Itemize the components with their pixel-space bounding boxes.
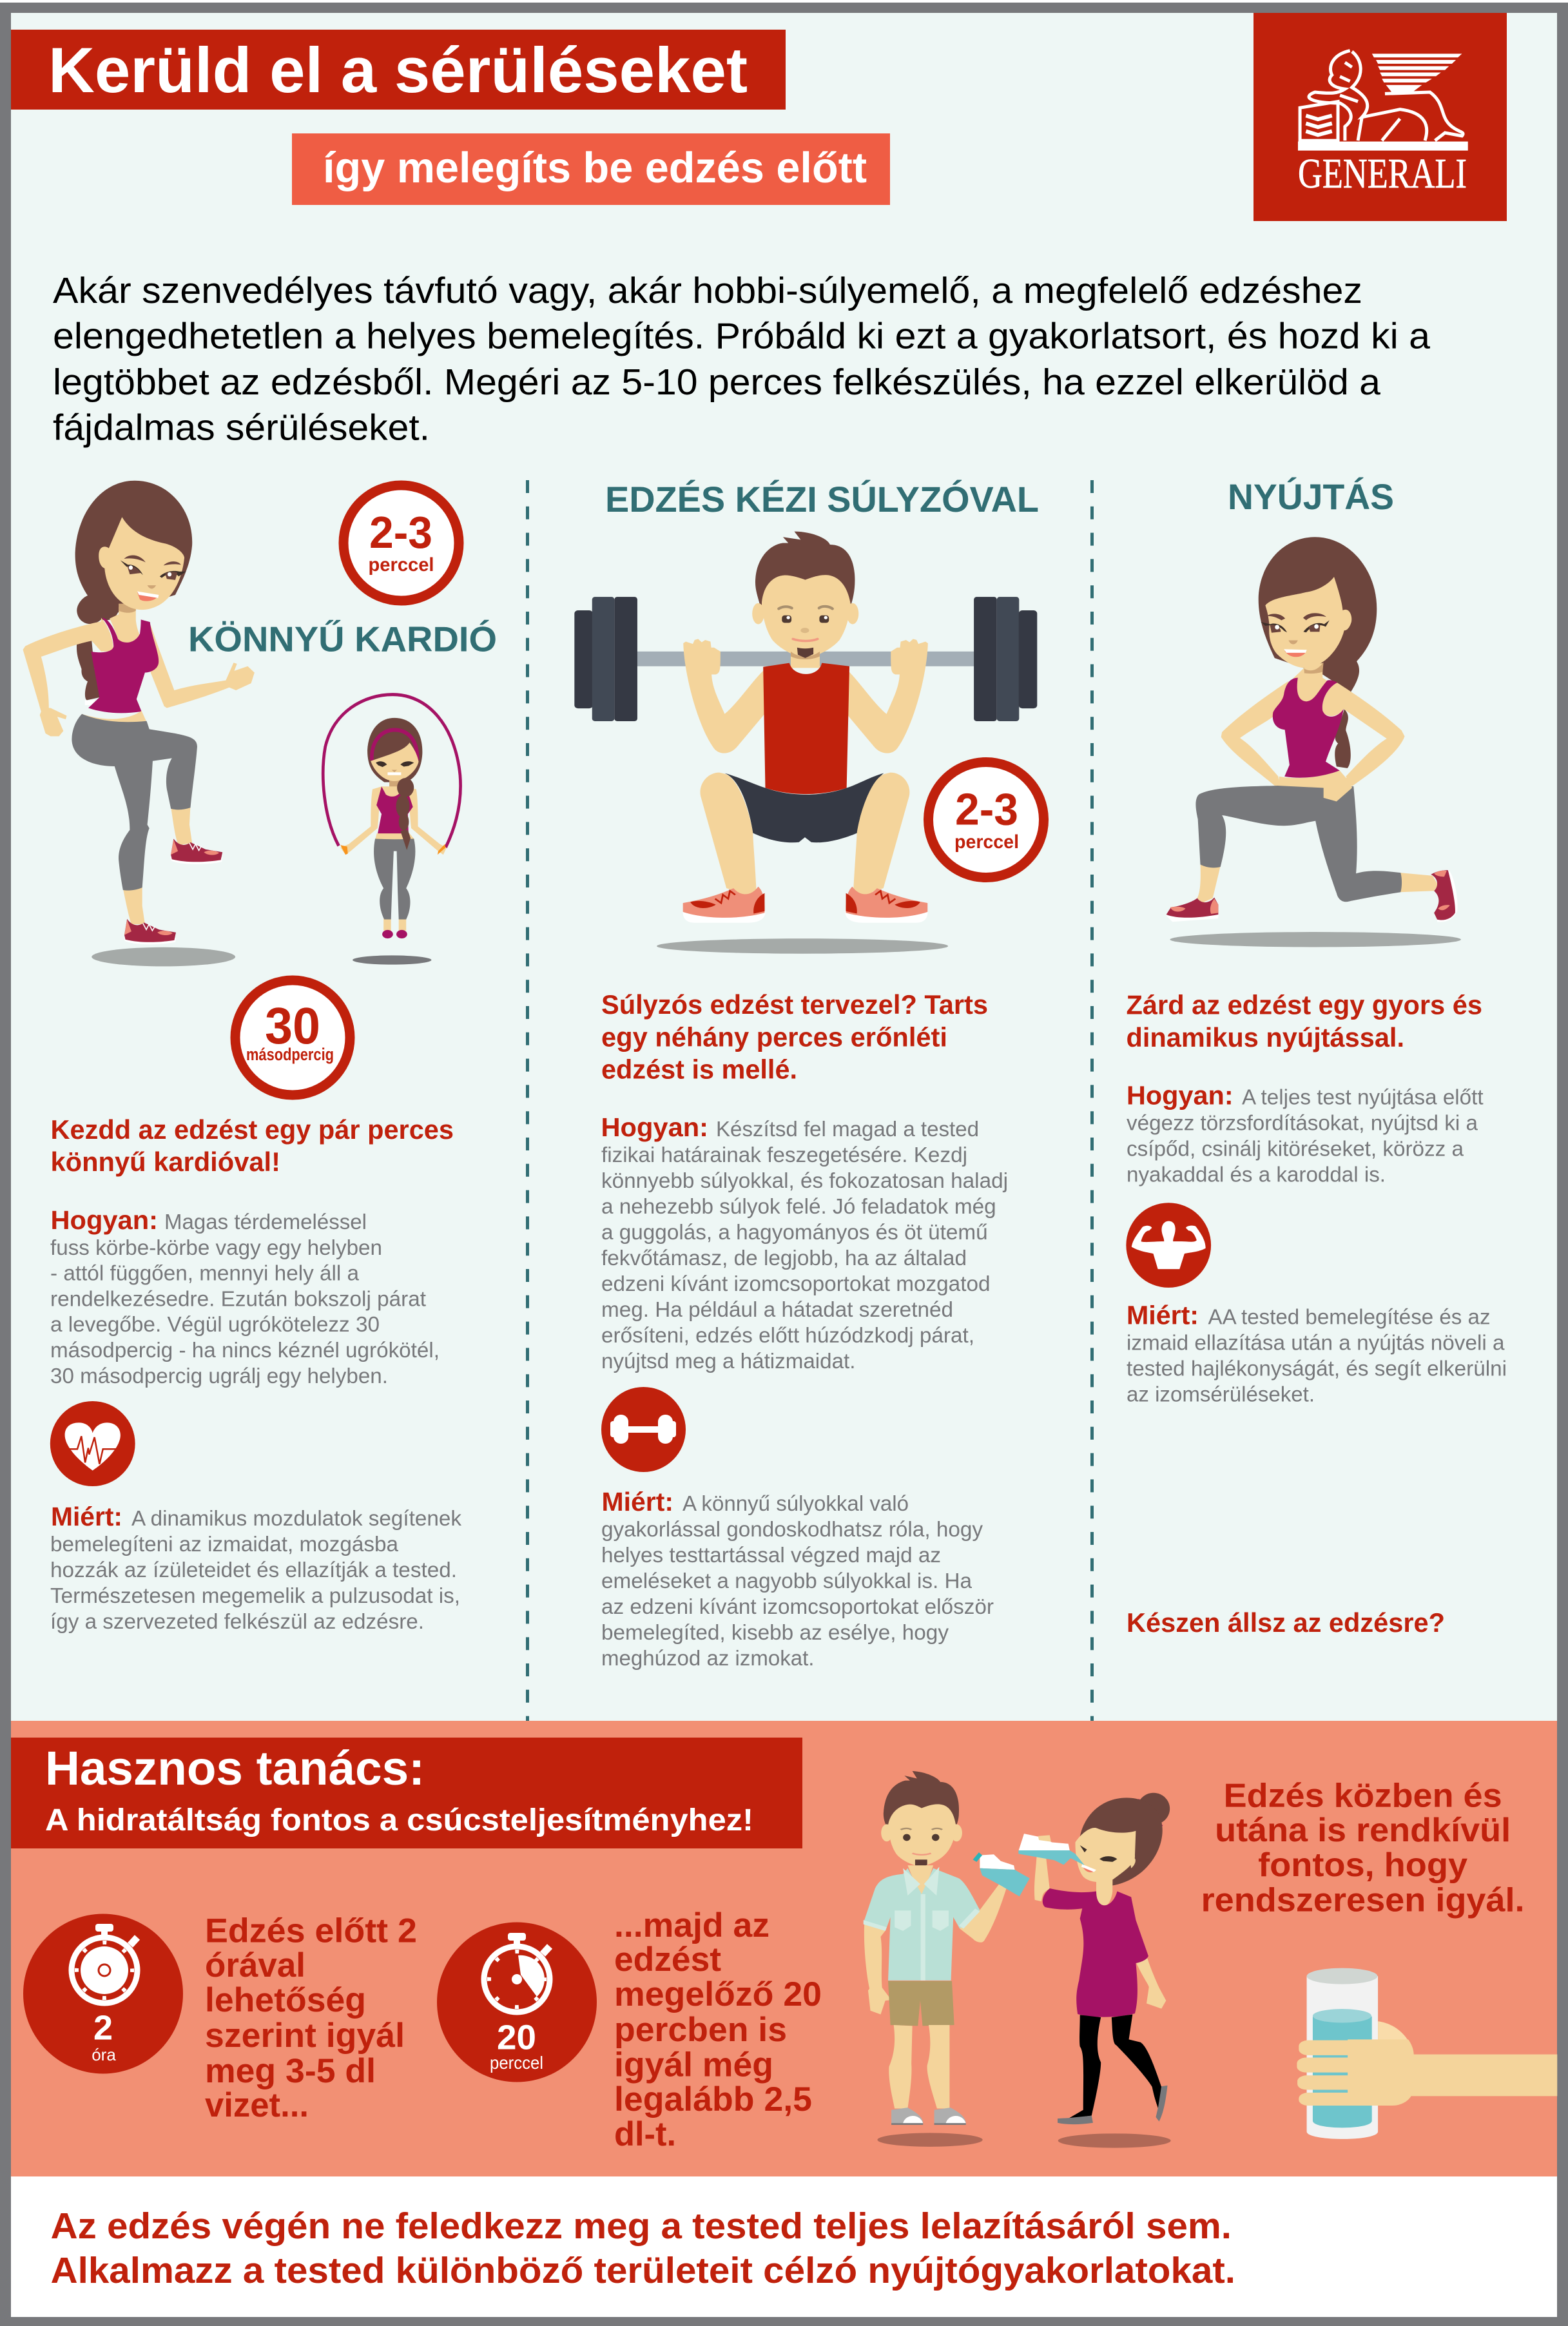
text: edzés közben és utána: utána is rendkívül [1215, 1812, 1511, 1849]
badge: 30 másodpercig [235, 980, 350, 1095]
text block: kardió: Magas térdemeléssel [164, 1210, 367, 1234]
text: majd az edzést megelőző: edzést [614, 1941, 721, 1979]
icon: stopwatch 20 perccel [437, 1922, 597, 2082]
badge: 30 másodpercig: másodpercig [246, 1045, 334, 1064]
text: edzés előtt: vizet... [205, 2086, 309, 2124]
panel: closing message: Az edzés végén ne feledkezz meg a tested teljes lelazításáról sem. [50, 2205, 1232, 2247]
banner: hasznos tanács: A hidratáltság fontos a csúcsteljesítményhez! [45, 1803, 753, 1837]
subtitle banner: így melegíts be edzés előtt [323, 144, 867, 192]
panel: hydration [11, 1721, 1557, 2176]
text block: miért (súlyzó): az edzeni kívánt izomcsoportokat először [601, 1594, 994, 1618]
text block: kardió: másodpercig - ha nincs kéznél ugrókötél, [50, 1338, 440, 1362]
call to action: készen állsz: Készen állsz az edzésre? [1127, 1607, 1445, 1638]
text block: súlyzós edzés: fizikai határainak feszegetésére. Kezdj [601, 1143, 967, 1167]
icon: stopwatch 2 óra: 2 [93, 2009, 113, 2048]
badge: 2-3 perccel (cardio): perccel [369, 554, 434, 576]
icon: stopwatch 20 perccel: perccel [490, 2053, 543, 2073]
text block: súlyzós edzés: edzést is mellé. [601, 1054, 797, 1084]
text: majd az edzést megelőző: megelőző 20 [614, 1975, 822, 2013]
text block: nyújtás: A teljes test nyújtása előtt [1242, 1085, 1484, 1109]
logo: Generali [1253, 13, 1507, 221]
text block: miért (kardió): A dinamikus mozdulatok segítenek [131, 1506, 461, 1530]
text block: súlyzós edzés: meg. Ha például a hátadat szeretnéd [601, 1297, 953, 1321]
text block: súlyzós edzés: könnyebb súlyokkal, és fokozatosan haladj [601, 1168, 1008, 1192]
text block: súlyzós edzés: a nehezebb súlyok felé. Jó feladatok még [601, 1194, 996, 1218]
text: majd az edzést megelőző: ...majd az [614, 1906, 769, 1944]
illustration: woman in lunge [1166, 537, 1461, 947]
text block: miért (kardió): így a szervezeted felkészül az edzésre. [50, 1609, 424, 1633]
text block: miért (nyújtás): tested hajlékonyságát, és segít elkerülni [1127, 1356, 1507, 1381]
text block: miért (súlyzó): meghúzod az izmokat. [601, 1646, 815, 1670]
text block: súlyzós edzés: egy néhány perces erőnléti [601, 1022, 947, 1052]
icon: stopwatch 20 perccel: 20 [497, 2019, 536, 2057]
text block: súlyzós edzés: edzeni kívánt izomcsoportokat mozgatod [601, 1272, 990, 1295]
text block: kardió: Kezdd az edzést egy pár perces [50, 1114, 454, 1145]
text block: nyújtás: nyakaddal és a karoddal is. [1127, 1163, 1386, 1186]
text block: kardió: fuss körbe-körbe vagy egy helyben [50, 1236, 382, 1259]
logo: Generali: GENERALI [1298, 150, 1467, 197]
icon: dumbbell [601, 1387, 686, 1472]
text block: miért (nyújtás) [1127, 1301, 1507, 1406]
text block: miért (súlyzó): gyakorlással gondoskodhatsz róla, hogy [601, 1517, 983, 1541]
text block: súlyzós edzés: Hogyan: [601, 1112, 708, 1142]
banner: hasznos tanács [11, 1738, 802, 1848]
text: edzés előtt: szerint igyál [205, 2017, 405, 2055]
heading: nyújtás: NYÚJTÁS [1228, 476, 1394, 517]
heading: edzés kézi súlyzóval: EDZÉS KÉZI SÚLYZÓVAL [605, 479, 1039, 519]
text block: miért (súlyzó): helyes testtartással végzed majd az [601, 1543, 941, 1567]
subtitle banner [292, 133, 890, 205]
text: majd az edzést megelőző: percben is [614, 2011, 787, 2049]
text: majd az edzést megelőző [614, 1906, 822, 2153]
badge: 2-3 perccel (cardio) [344, 485, 459, 601]
text block: miért (súlyzó): A könnyű súlyokkal való [682, 1491, 909, 1515]
text block: súlyzós edzés: fekvőtámasz, de legjobb, ha az általad [601, 1246, 967, 1270]
illustration: woman drinking [1018, 1793, 1171, 2148]
illustration: girl with jump rope [323, 695, 461, 965]
illustration: man squatting with barbell [574, 532, 1037, 954]
text block: nyújtás: dinamikus nyújtással. [1127, 1022, 1404, 1052]
text block: kardió: könnyű kardióval! [50, 1147, 280, 1177]
text block: miért (súlyzó): emeléseket a nagyobb súlyokkal is. Ha [601, 1569, 973, 1593]
text block: miért (kardió): Természetesen megemelik a pulzusodat is, [50, 1584, 460, 1607]
panel: closing message [11, 2176, 1557, 2317]
title banner: Kerüld el a sérüléseket [48, 34, 748, 106]
text block: súlyzós edzés: nyújtsd meg a hátizmaidat. [601, 1349, 856, 1373]
icon: heart with pulse [50, 1401, 135, 1486]
heading: könnyű kardió: KÖNNYŰ KARDIÓ [188, 619, 497, 659]
text block: nyújtás: Hogyan: [1127, 1081, 1234, 1110]
text: edzés előtt: Edzés előtt 2 [205, 1912, 417, 1950]
intro paragraph: Akár szenvedélyes távfutó vagy, akár hobbi-súlyemelő, a megfelelő edzéshez [53, 270, 1362, 311]
intro paragraph [53, 270, 1430, 449]
text: edzés előtt: lehetőség [205, 1981, 366, 2019]
text: edzés közben és utána: rendszeresen igyál. [1201, 1882, 1525, 1919]
text block: kardió [50, 1114, 454, 1388]
text: majd az edzést megelőző: dl-t. [614, 2115, 676, 2153]
illustration: man drinking [864, 1771, 1030, 2147]
text: edzés előtt: órával [205, 1946, 305, 1984]
text block: kardió: - attól függően, mennyi hely áll a [50, 1261, 360, 1285]
text block: miért (nyújtás): AA tested bemelegítése és az [1208, 1304, 1490, 1329]
text block: súlyzós edzés: a guggolás, a hagyományos és öt ütemű [601, 1220, 988, 1244]
text: edzés közben és utána: fontos, hogy [1258, 1846, 1467, 1884]
text block: miért (nyújtás): izmaid ellazítása után a nyújtás növeli a [1127, 1330, 1505, 1355]
banner: hasznos tanács: Hasznos tanács: [45, 1741, 425, 1795]
badge: 2-3 perccel (weights): perccel [954, 831, 1019, 853]
text block: miért (kardió) [50, 1502, 461, 1633]
icon: stopwatch 2 óra: óra [92, 2045, 116, 2064]
text block: miért (súlyzó) [601, 1487, 994, 1670]
text block: súlyzós edzés: Készítsd fel magad a tested [716, 1117, 979, 1141]
text: edzés előtt: meg 3-5 dl [205, 2052, 376, 2090]
text block: kardió: a levegőbe. Végül ugrókötelezz 30 [50, 1312, 380, 1336]
badge: 30 másodpercig: 30 [265, 997, 320, 1054]
intro paragraph: elengedhetetlen a helyes bemelegítés. Próbáld ki ezt a gyakorlatsort, és hozd ki a [53, 316, 1430, 357]
illustration: running woman [23, 481, 255, 966]
text block: kardió: rendelkezésedre. Ezután bokszolj párat [50, 1286, 426, 1311]
text: edzés közben és utána: Edzés közben és [1224, 1778, 1502, 1815]
text: majd az edzést megelőző: legalább 2,5 [614, 2080, 812, 2118]
text block: súlyzós edzés: erősíteni, edzés előtt húzódzkodj párat, [601, 1323, 974, 1347]
text block: nyújtás [1127, 990, 1484, 1186]
intro paragraph: legtöbbet az edzésből. Megéri az 5-10 perces felkészülés, ha ezzel elkerülöd a [53, 362, 1380, 403]
text: majd az edzést megelőző: igyál még [614, 2046, 773, 2084]
text block: miért (nyújtás): az izomsérüléseket. [1127, 1382, 1315, 1406]
text block: miért (kardió): bemelegíteni az izmaidat, mozgásba [50, 1532, 399, 1556]
text block: kardió: Hogyan: [50, 1205, 158, 1235]
text block: miért (súlyzó): Miért: [602, 1487, 673, 1517]
text: edzés előtt [205, 1912, 417, 2124]
badge: 2-3 perccel (weights): 2-3 [955, 784, 1018, 835]
illustration: hand with water glass [1297, 1968, 1557, 2139]
text block: nyújtás: Zárd az edzést egy gyors és [1127, 990, 1482, 1020]
badge: 2-3 perccel (weights) [928, 762, 1044, 878]
text block: nyújtás: csípőd, csinálj kitöréseket, körözz a [1127, 1137, 1464, 1161]
panel: closing message: Alkalmazz a tested különböző területeit célzó nyújtógyakorlatokat. [50, 2250, 1235, 2291]
text block: miért (nyújtás): Miért: [1127, 1301, 1199, 1330]
text block: miért (kardió): Miért: [51, 1502, 122, 1531]
icon: stopwatch 2 óra [23, 1914, 183, 2074]
intro paragraph: fájdalmas sérüléseket. [53, 407, 430, 449]
badge: 2-3 perccel (cardio): 2-3 [369, 507, 432, 557]
icon: muscle figure [1126, 1203, 1211, 1288]
text block: súlyzós edzés [601, 989, 1008, 1373]
text block: kardió: 30 másodpercig ugrálj egy helyben. [50, 1364, 388, 1388]
text block: miért (kardió): hozzák az ízületeidet és ellazítják a tested. [50, 1558, 457, 1582]
text block: miért (súlyzó): bemelegíted, kisebb az esélye, hogy [601, 1620, 949, 1644]
text block: nyújtás: végezz törzsfordításokat, nyújtsd ki a [1127, 1111, 1478, 1135]
text block: súlyzós edzés: Súlyzós edzést tervezel? Tarts [601, 989, 988, 1020]
text: edzés közben és utána [1201, 1778, 1525, 1919]
